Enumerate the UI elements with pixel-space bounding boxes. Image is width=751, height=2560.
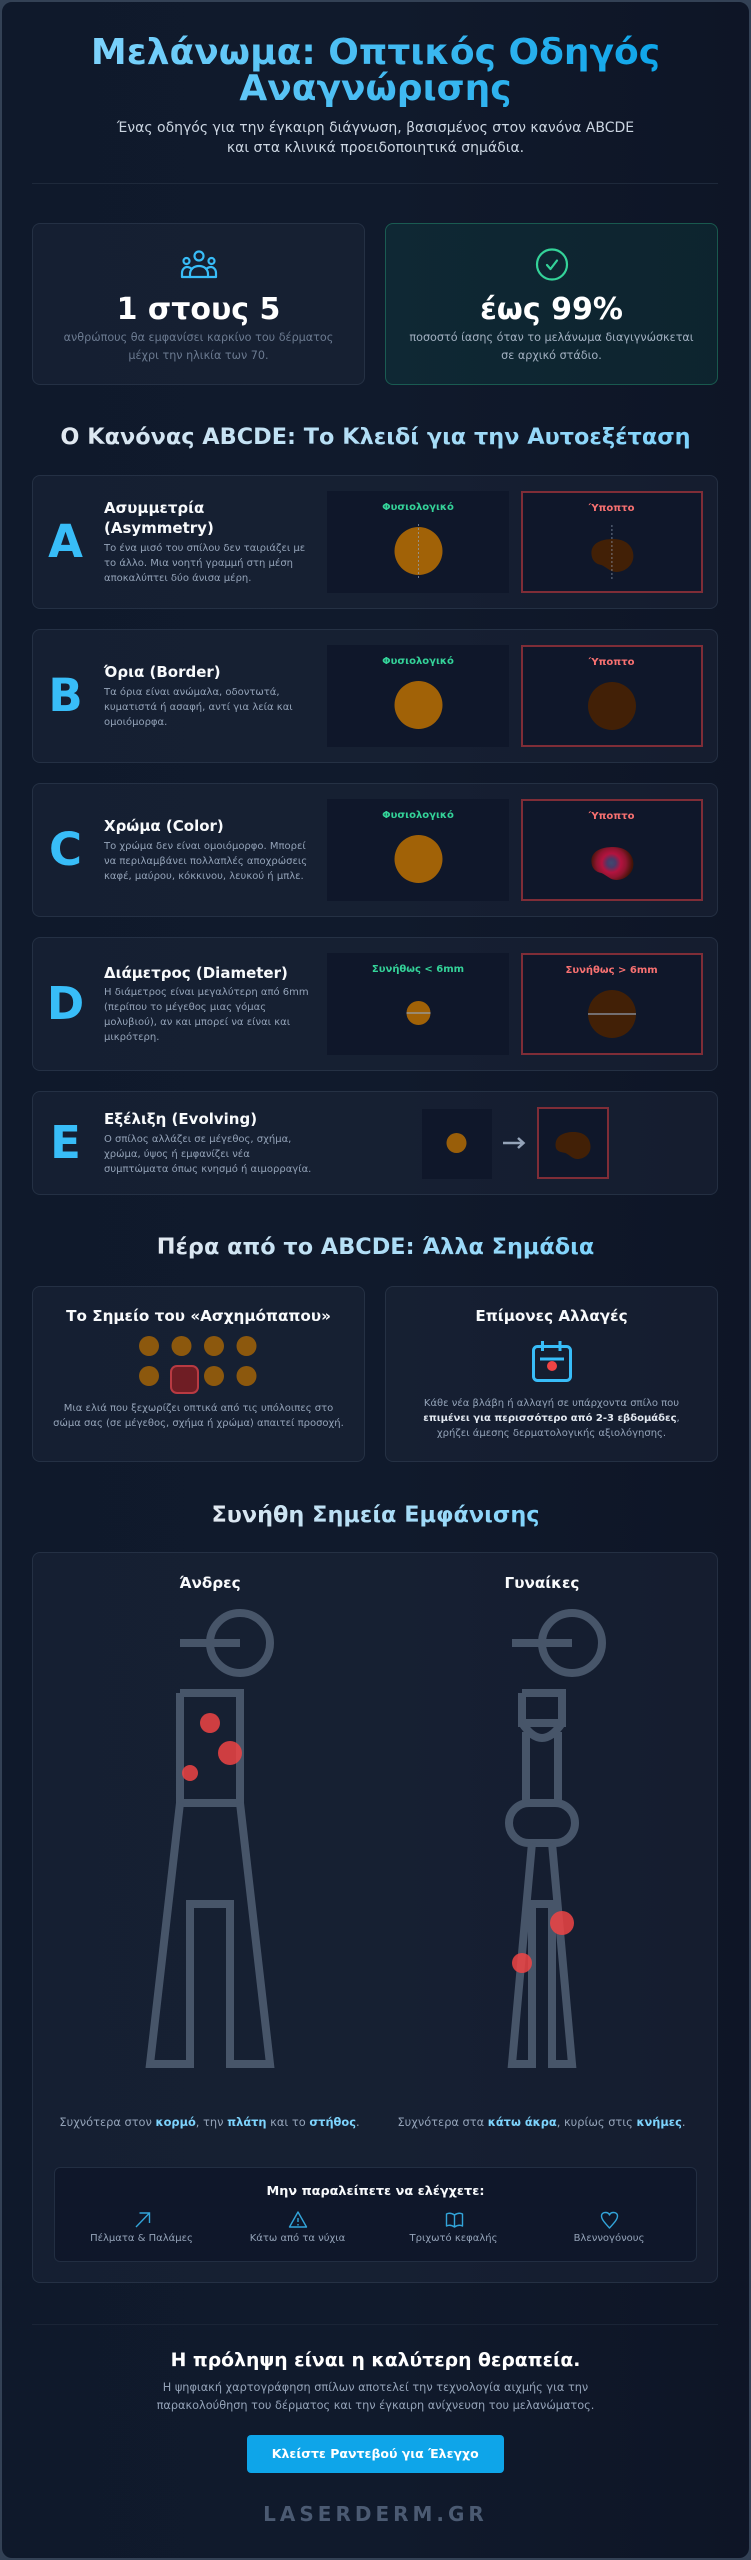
panel: B border: [32, 629, 718, 763]
text: evolving: [104, 1110, 311, 1175]
figure: female body with marked zones: [505, 1609, 606, 2068]
panel: statistic 1 in 5: [32, 223, 365, 385]
example: normal mole: Φυσιολογικό: [382, 810, 454, 821]
checklist heading: Μην παραλείπετε να ελέγχετε:: [267, 2184, 484, 2199]
example: small mole: Συνήθως < 6mm: [372, 964, 464, 975]
item: mucous membranes: [574, 2212, 644, 2244]
subtitle: [116, 120, 634, 156]
item: mucous membranes: Βλεννογόνους: [574, 2233, 644, 2244]
text: diameter: [104, 964, 309, 1043]
closing text: [157, 2381, 594, 2412]
text: color: [104, 817, 307, 882]
statistic caption: σε αρχικό στάδιο.: [501, 349, 602, 362]
item: under the nails: [250, 2211, 345, 2244]
example: normal mole: [327, 491, 509, 593]
panel: statistic cure rate: [385, 223, 718, 385]
example: suspicious multicolor mole: [521, 799, 703, 901]
statistic caption: ανθρώπους θα εμφανίσει καρκίνο του δέρματος: [64, 331, 333, 344]
letter E: E: [50, 1116, 81, 1169]
closing text: παρακολούθηση του δέρματος και την έγκαιρη ανίχνευση του μελανώματος.: [157, 2399, 594, 2412]
panel: checklist: [54, 2167, 697, 2262]
title: Μελάνωμα: Οπτικός Οδηγός: [91, 32, 660, 72]
panel: D diameter: [32, 937, 718, 1071]
closing text: Η ψηφιακή χαρτογράφηση σπίλων αποτελεί την τεχνολογία αιχμής για την: [163, 2381, 588, 2394]
letter A: A: [48, 515, 83, 568]
figure: male body with marked zones: [146, 1609, 274, 2068]
item: soles and palms: [90, 2212, 193, 2244]
heading: common locations: Συνήθη Σημεία Εμφάνισης: [211, 1502, 540, 1528]
letter D: D: [47, 977, 84, 1030]
brand footer: LASERDERM.GR: [263, 2502, 488, 2526]
text: border: Όρια (Border): [104, 663, 221, 681]
text: asymmetry: αποκαλύπτει δύο άνισα μέρη.: [104, 573, 251, 584]
icon: calendar: [532, 1341, 572, 1382]
title: Αναγνώρισης: [239, 68, 512, 108]
caption: women: Συχνότερα στα κάτω άκρα, κυρίως στις κνήμες.: [397, 2115, 686, 2129]
card description: Μια ελιά που ξεχωρίζει οπτικά από τις υπόλοιπες στο: [64, 1403, 333, 1414]
example: suspicious mole: Ύποπτο: [589, 657, 634, 668]
letter B: B: [48, 669, 83, 722]
example: suspicious mole: Ύποπτο: [589, 503, 634, 514]
arrow: [503, 1137, 526, 1149]
heading: ABCDE rule: Ο Κανόνας ABCDE: Το Κλειδί για την Αυτοεξέταση: [60, 424, 691, 450]
example: suspicious multicolor mole: Ύποπτο: [589, 811, 634, 822]
example: normal mole: [327, 799, 509, 901]
text: color: Χρώμα (Color): [104, 817, 224, 835]
button: [246, 2435, 504, 2472]
card description: χρήζει άμεσης δερματολογικής αξιολόγησης.: [437, 1428, 666, 1439]
icon: check circle: [536, 248, 568, 281]
text: asymmetry: (Asymmetry): [104, 519, 214, 537]
text: diameter: μικρότερη.: [104, 1032, 159, 1043]
text: border: Τα όρια είναι ανώμαλα, οδοντωτά,: [104, 687, 280, 698]
text: evolving: Εξέλιξη (Evolving): [104, 1110, 257, 1128]
example: mole after: [536, 1107, 608, 1179]
text: color: καφέ, μαύρου, κόκκινου, λευκού ή μπλε.: [104, 871, 304, 882]
text: color: να περιλαμβάνει πολλαπλές αποχρώσεις: [104, 856, 307, 867]
closing heading: Η πρόληψη είναι η καλύτερη θεραπεία.: [171, 2350, 580, 2371]
letter C: C: [49, 823, 82, 876]
icon: grid of moles with one outlier: [139, 1336, 256, 1394]
example: large mole: Συνήθως > 6mm: [566, 965, 658, 976]
statistic caption: ποσοστό ίασης όταν το μελάνωμα διαγιγνώσκεται: [409, 331, 694, 344]
card title: Το Σημείο του «Ασχημόπαπου»: [66, 1307, 331, 1325]
label: men: Άνδρες: [179, 1574, 241, 1592]
text: evolving: Ο σπίλος αλλάζει σε μέγεθος, σχήμα,: [104, 1134, 291, 1145]
text: asymmetry: [104, 499, 305, 584]
card description: επιμένει για περισσότερο από 2-3 εβδομάδες,: [423, 1413, 680, 1424]
example: mole before: [422, 1109, 492, 1179]
text: evolving: χρώμα, ύψος ή εμφανίζει νέα: [104, 1149, 250, 1160]
text: diameter: μολυβιού), αν και μπορεί να είναι και: [104, 1017, 290, 1028]
example: small mole: [327, 953, 509, 1055]
label: women: Γυναίκες: [505, 1574, 579, 1592]
caption: men: Συχνότερα στον κορμό, την πλάτη και το στήθος.: [59, 2115, 360, 2129]
card description: Κάθε νέα βλάβη ή αλλαγή σε υπάρχοντα σπίλο που: [424, 1398, 679, 1409]
example: normal mole: [327, 645, 509, 747]
card title: Επίμονες Αλλαγές: [475, 1307, 628, 1325]
panel: C color: [32, 783, 718, 917]
item: under the nails: Κάτω από τα νύχια: [250, 2233, 345, 2244]
text: diameter: Η διάμετρος είναι μεγαλύτερη από 6mm: [104, 987, 309, 998]
panel: A asymmetry: [32, 475, 718, 609]
statistic value: 1 στους 5: [117, 292, 280, 327]
title: [91, 32, 660, 108]
heading: other signs: Πέρα από το ABCDE: Άλλα Σημάδια: [157, 1234, 594, 1260]
text: border: [104, 663, 293, 728]
example: suspicious mole: [521, 491, 703, 593]
panel: ugly duckling sign: [32, 1286, 365, 1462]
panel: persistent changes: [385, 1286, 718, 1462]
example: normal mole: Φυσιολογικό: [382, 656, 454, 667]
example: large mole: [521, 953, 703, 1055]
button: Κλείστε Ραντεβού για Έλεγχο: [272, 2446, 479, 2461]
text: color: Το χρώμα δεν είναι ομοιόμορφο. Μπορεί: [104, 841, 306, 852]
text: asymmetry: Ασυμμετρία: [104, 499, 204, 517]
text: diameter: (περίπου το μέγεθος μιας γόμας: [104, 1002, 266, 1013]
example: suspicious mole: [521, 645, 703, 747]
statistic caption: [64, 331, 333, 362]
text: asymmetry: Το ένα μισό του σπίλου δεν ταιριάζει με: [104, 543, 305, 554]
statistic caption: μέχρι την ηλικία των 70.: [128, 349, 269, 362]
text: diameter: Διάμετρος (Diameter): [104, 964, 288, 982]
text: asymmetry: το άλλο. Μια νοητή γραμμή στη μέση: [104, 558, 293, 569]
item: scalp: Τριχωτό κεφαλής: [410, 2233, 497, 2244]
icon: group of people: [180, 250, 218, 278]
item: soles and palms: Πέλματα & Παλάμες: [90, 2233, 193, 2244]
example: normal mole: Φυσιολογικό: [382, 502, 454, 513]
card description: [53, 1403, 344, 1429]
card description: σώμα σας (σε μέγεθος, σχήμα ή χρώμα) απαιτεί προσοχή.: [53, 1418, 344, 1429]
text: border: ομοιόμορφα.: [104, 717, 167, 728]
subtitle: και στα κλινικά προειδοποιητικά σημάδια.: [227, 140, 524, 156]
subtitle: Ένας οδηγός για την έγκαιρη διάγνωση, βασισμένος στον κανόνα ABCDE: [117, 120, 634, 136]
panel: E evolving: [32, 1091, 718, 1195]
card description: [423, 1398, 680, 1439]
text: border: κυματιστά ή ασαφή, αντί για λεία και: [104, 702, 293, 713]
text: evolving: συμπτώματα όπως κνησμό ή αιμορραγία.: [104, 1164, 311, 1175]
panel: body map: [32, 1552, 718, 2283]
item: scalp: [409, 2212, 497, 2244]
statistic caption: [409, 331, 694, 362]
statistic value: έως 99%: [480, 292, 623, 327]
